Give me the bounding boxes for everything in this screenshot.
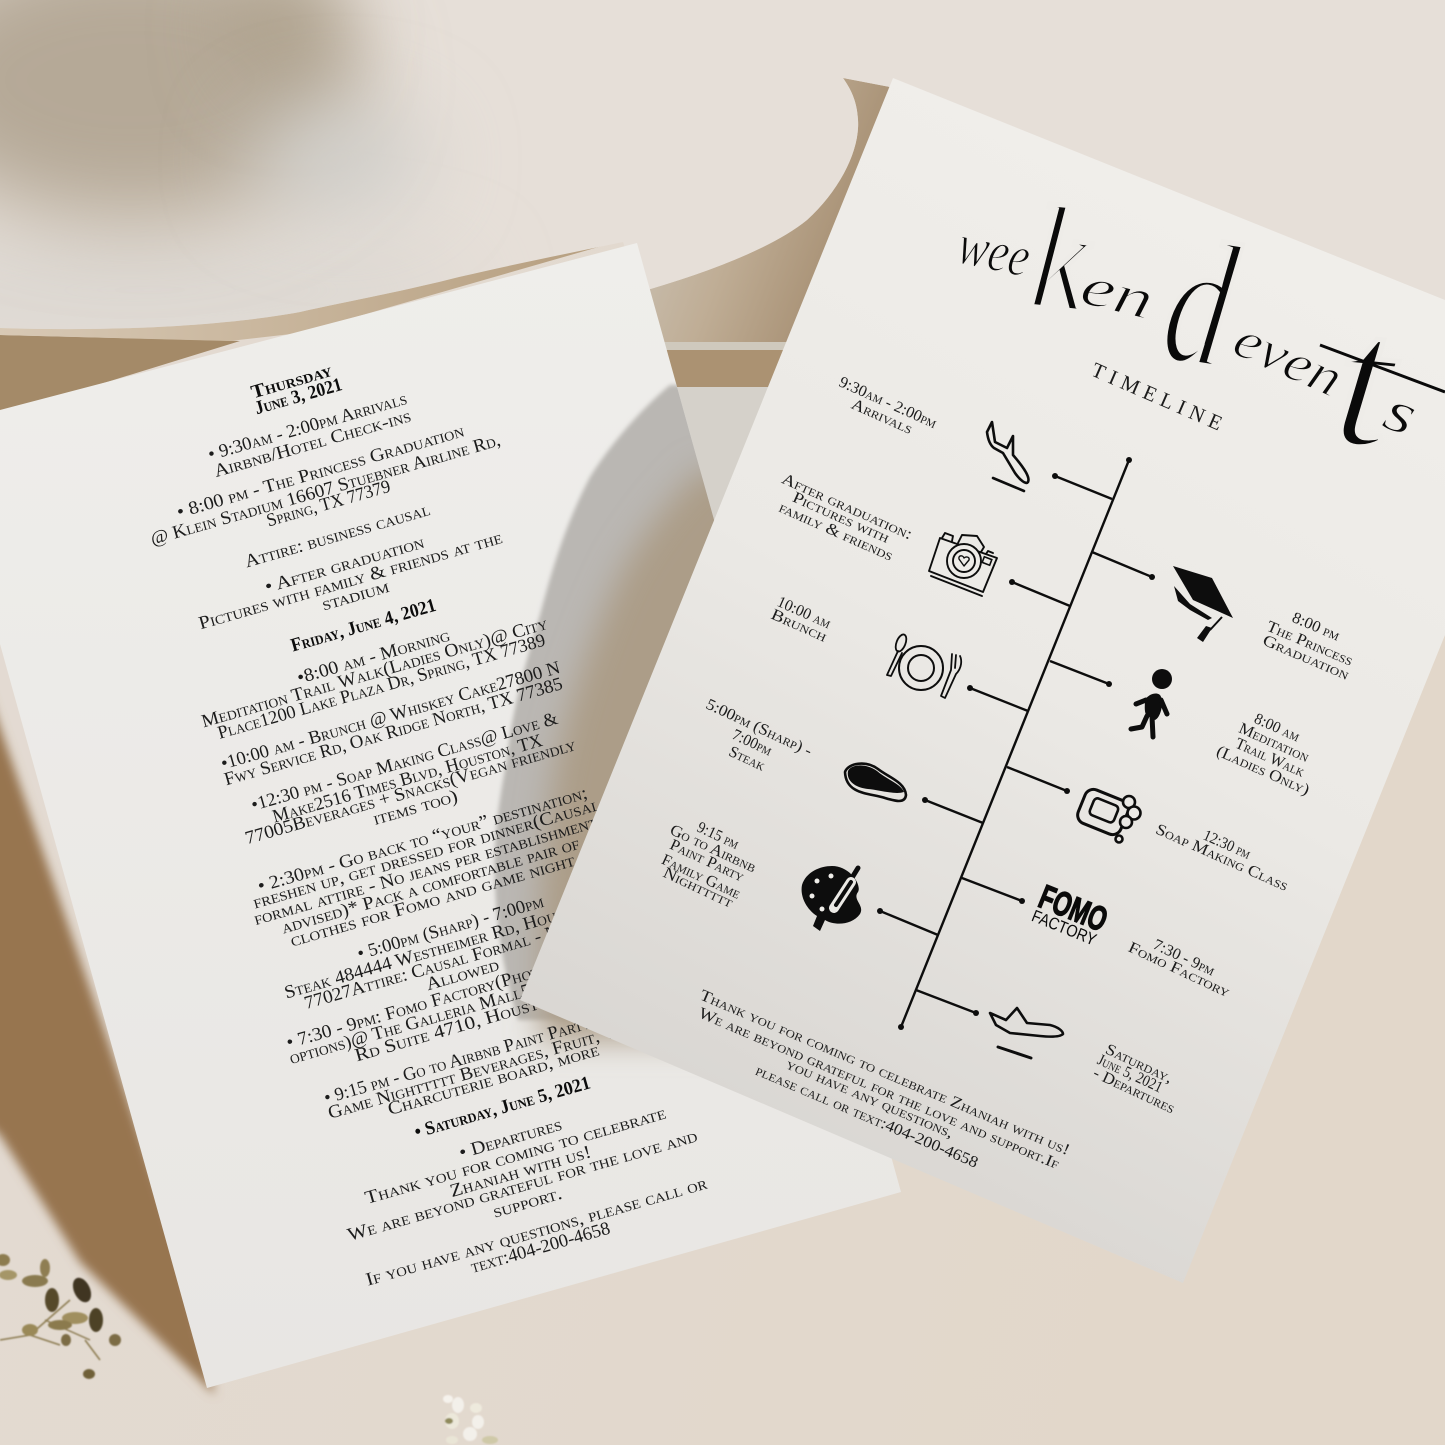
text block: Friday events: Rd Suite 4710, Houston, TX <box>353 978 599 1066</box>
logo: FOMO Factory <box>1029 878 1113 949</box>
subtitle: timeline: TIMELINE <box>1088 357 1232 438</box>
label: soap class: 12:30 pm <box>1201 827 1253 863</box>
label: steak: Steak <box>726 743 768 775</box>
text block: thank you note: you have any questions, <box>784 1056 956 1142</box>
text block: Thursday events: • After graduation <box>263 533 427 598</box>
text block: Friday events: 77005Beverages + Snacks(Vegan friendly <box>243 735 579 849</box>
text block: Friday events: • 2:30pm - Go back to “your” destination; <box>255 783 590 897</box>
label: FOMO factory: 7:30 - 9pm <box>1150 936 1218 980</box>
title: weekend events: even <box>1225 308 1352 409</box>
title: weekend events: k <box>1025 174 1100 345</box>
text block: thank you note: Thank you for coming to celebrate Zhaniah with us! <box>697 987 1072 1159</box>
label: paint party <box>659 819 759 912</box>
label: paint party: Paint Party <box>667 836 747 886</box>
text block: Saturday and thank you: support. <box>491 1184 565 1223</box>
text block: Saturday and thank you: text:404-200-4658 <box>469 1219 613 1278</box>
icon: plane arriving <box>990 1008 1063 1058</box>
text block: Friday events: Meditation Trail Walk(Ladies Only)@ City <box>199 614 551 732</box>
label: pictures: family & friends <box>776 499 895 565</box>
icon: paint palette <box>802 866 861 931</box>
title: weekend events: s <box>1376 376 1426 448</box>
label: pictures <box>776 470 915 565</box>
text block: Saturday and thank you: • Departures <box>457 1115 564 1163</box>
text block: Friday events: options)@ The Galleria Mall5085 Westheimer <box>287 945 656 1069</box>
text block: Friday events: Fwy Service Rd, Oak Ridge North, TX 77385 <box>222 674 565 790</box>
title: weekend events <box>962 207 1445 444</box>
title: weekend events: en <box>1075 254 1160 332</box>
label: departures: Saturday, <box>1103 1041 1175 1087</box>
text block: Friday events: Charcuterie board, more <box>386 1040 602 1120</box>
label: brunch: 10:00 am <box>774 594 834 632</box>
text block: Friday events: clothes for Fomo and game night <box>288 851 577 951</box>
icon: camera <box>929 533 997 596</box>
text block: thank you note: We are beyond grateful for the love and support.If <box>696 1005 1062 1173</box>
title: weekend events: d <box>1152 200 1249 407</box>
text block: Friday events: freshen up, get dressed for dinner(Causal <box>251 795 602 913</box>
label: pictures: Pictures with <box>790 489 892 547</box>
label: pictures: After graduation: <box>779 470 915 543</box>
label: departures: - Departures <box>1090 1065 1177 1117</box>
text block: Friday events: •10:00 am - Brunch @ Whiskey Cake27800 N <box>219 658 563 774</box>
heading: Thursday: Thursday <box>249 360 335 403</box>
text block: Saturday and thank you: If you have any questions, please call or <box>364 1174 710 1291</box>
label: paint party: 9:15 pm <box>694 819 742 853</box>
heading: Saturday: • Saturday, June 5, 2021 <box>412 1073 593 1143</box>
label: brunch <box>768 594 834 646</box>
text block: thank you note <box>696 987 1072 1173</box>
title: weekend events: t <box>1326 275 1408 490</box>
text block: Thursday events: • 9:30am - 2:00pm Arrivals <box>206 389 409 465</box>
icon: steak <box>845 764 906 801</box>
icon: soap bar <box>1075 787 1140 842</box>
text block: Thursday events: @ Klein Stadium 16607 Stuebner Airline Rd, <box>148 431 503 550</box>
label: graduation: Graduation <box>1260 632 1351 684</box>
text block: Saturday and thank you: We are beyond grateful for the love and <box>345 1127 700 1246</box>
label: meditation walk <box>1214 710 1312 799</box>
text block: Friday events <box>199 614 656 1124</box>
text block: Friday events: 77027Attire: Causal Formal - No jeans <box>302 906 615 1014</box>
label: steak: 5:00pm (Sharp) - <box>703 696 815 760</box>
icon: walking person <box>1131 669 1172 737</box>
text block: Thursday events <box>148 389 505 634</box>
title: weekend events: wee <box>952 211 1036 290</box>
label: paint party: Family Game <box>659 851 743 903</box>
label: meditation walk: 8:00 am <box>1251 710 1302 746</box>
icon: graduation cap <box>1173 566 1233 642</box>
timeline spine and branches <box>877 457 1155 1030</box>
label: arrivals: 9:30am - 2:00pm <box>836 374 939 432</box>
panel: back card, written schedule <box>0 243 901 1388</box>
decoration: white flowers bottom centre <box>443 1395 498 1444</box>
text block: Friday events: Game Nighttttt Beverages, Fruit, Wine, <box>326 1013 651 1124</box>
text block: Friday events: Steak 484444 Westheimer Rd, Houston, TX <box>282 887 628 1003</box>
text block: Saturday and thank you <box>345 1104 710 1291</box>
text block: Saturday and thank you: Thank you for coming to celebrate <box>363 1104 668 1209</box>
icon: plane departing <box>987 422 1028 491</box>
text block: Friday events: •12:30 pm - Soap Making Class@ Love & <box>249 709 561 816</box>
text block: Thursday events: Spring, TX 77379 <box>264 477 393 531</box>
text block: Thursday events: stadium <box>320 577 392 615</box>
label: brunch: Brunch <box>768 606 829 646</box>
text block: Thursday events: Pictures with family & friends at the <box>196 528 505 634</box>
label: graduation <box>1260 609 1355 684</box>
text block: Friday events: • 5:00pm (Sharp) - 7:00pm <box>355 892 547 964</box>
text block: Friday events: Allowed <box>424 955 501 995</box>
logo: FOMO Factory: FOMO <box>1034 878 1113 940</box>
label: departures <box>1090 1041 1177 1117</box>
text block: Friday events: Make2516 Times Blvd, Houston, TX <box>270 731 546 827</box>
text block: Friday events: Place1200 Lake Plaza Dr, Spring, TX 77389 <box>215 631 548 744</box>
icon: plate and cutlery <box>887 633 961 698</box>
text block: Friday events: advised)* Pack a comfortable pair of <box>279 834 582 938</box>
label: FOMO factory: Fomo Factory <box>1125 939 1232 1001</box>
heading: Thursday: June 3, 2021 <box>252 374 345 419</box>
label: meditation walk: Meditation <box>1236 720 1312 766</box>
label: graduation: The Princess <box>1264 618 1355 670</box>
text block: Friday events: • 7:30 - 9pm: Fomo Factory(Photo <box>284 959 551 1053</box>
text block: thank you note: please call or text:404-200-4658 <box>753 1062 981 1172</box>
text block: Saturday and thank you: Zhaniah with us! <box>448 1142 594 1202</box>
background: bands and shadows behind cards <box>0 78 890 1395</box>
logo: FOMO Factory: FACTORY <box>1029 906 1099 949</box>
label: graduation: 8:00 pm <box>1289 609 1342 645</box>
text block: Thursday events: Airbnb/Hotel Check-ins <box>212 406 413 482</box>
text block: Friday events: formal attire - No jeans per establishment <box>252 813 600 930</box>
text block: Friday events: items too) <box>371 787 460 830</box>
label: arrivals: Arrivals <box>849 396 915 438</box>
decoration: dried flowers bottom left <box>0 1254 121 1379</box>
label: paint party: Go to Airbnb <box>667 822 759 876</box>
shadow across back card <box>492 383 714 1061</box>
text block: Thursday events: • 8:00 pm - The Princess Graduation <box>175 421 467 523</box>
text block: Thursday events: Attire: business causal <box>243 500 433 572</box>
label: meditation walk: (Ladies Only) <box>1214 743 1312 799</box>
panel: front card, timeline <box>520 78 1445 1283</box>
label: meditation walk: Trail Walk <box>1233 735 1307 781</box>
curved paper sheet with soft shadow <box>0 0 1445 340</box>
text block: Friday events: • 9:15 pm - Go to Airbnb Paint Party Family <box>322 998 648 1109</box>
label: paint party: Nighttttt <box>660 864 736 912</box>
label: soap class: Soap Making Class <box>1153 821 1291 895</box>
text block: Friday events: •8:00 am - Morning <box>295 626 452 689</box>
heading: Friday: Friday, June 4, 2021 <box>288 595 438 656</box>
label: steak: 7:00pm <box>729 726 775 760</box>
label: departures: June 5, 2021 <box>1095 1051 1165 1096</box>
